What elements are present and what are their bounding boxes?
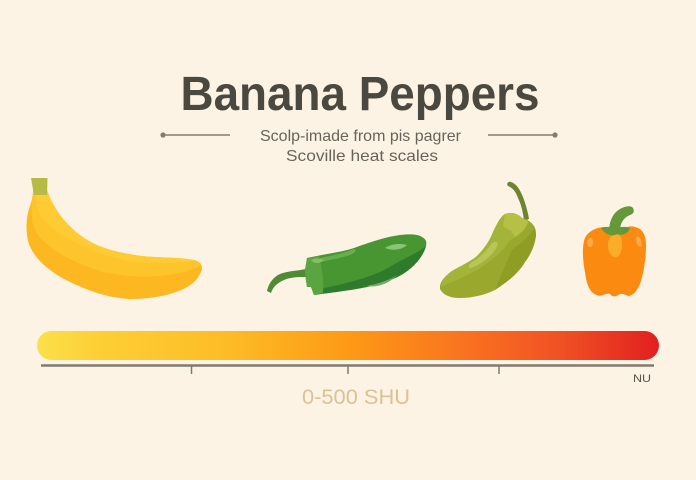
subtitle: Scoville heat scales	[286, 148, 438, 165]
right divider with dot	[488, 132, 558, 138]
subtitle	[260, 128, 462, 165]
axis end label: NU	[633, 373, 651, 385]
icon: green jalapeno pepper	[267, 234, 426, 295]
scale axis with ticks	[41, 365, 654, 374]
SHU range label: 0-500 SHU	[302, 386, 410, 409]
heat scale gradient bar	[37, 331, 659, 360]
subtitle: Scolp-imade from pis pagrer	[260, 128, 462, 145]
icon: orange bell pepper	[583, 206, 646, 296]
left divider with dot	[160, 132, 230, 138]
icon: yellow-green pepper	[440, 182, 536, 298]
title: Banana Peppers	[180, 68, 540, 121]
icon: banana	[27, 178, 202, 299]
